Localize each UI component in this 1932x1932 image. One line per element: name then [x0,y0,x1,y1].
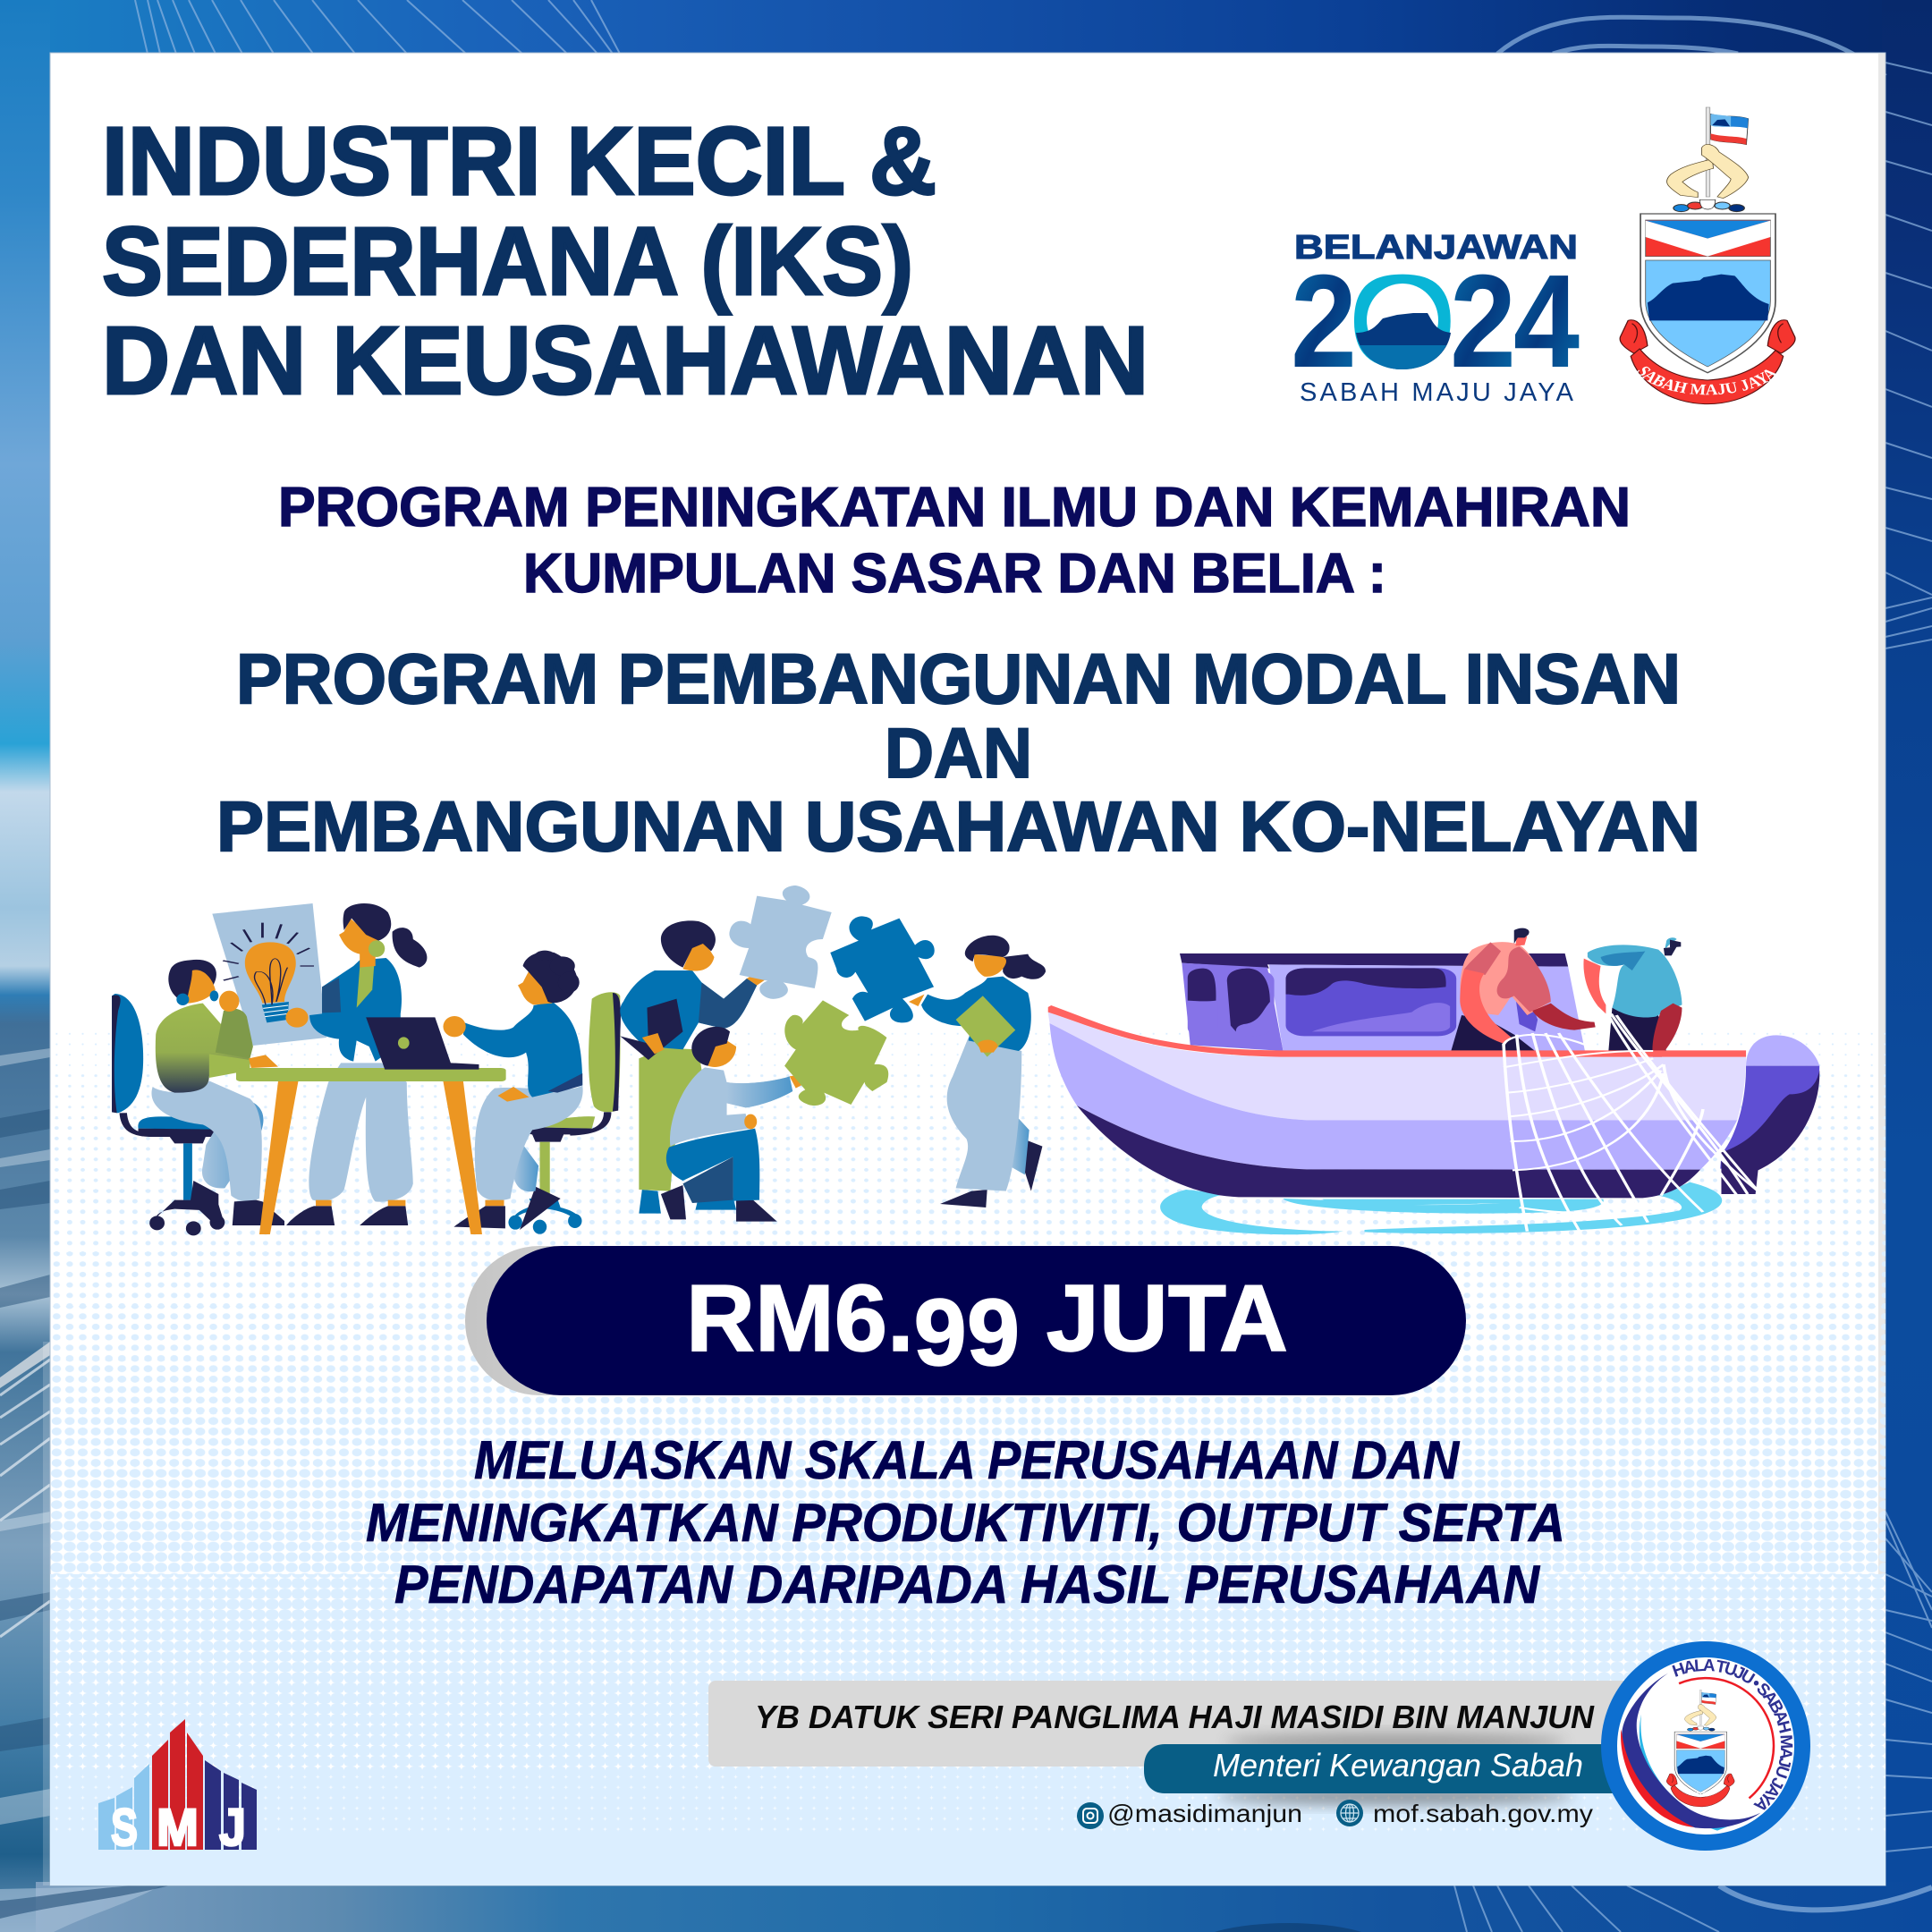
logo: Hala Tuju Sabah Maju Jaya badge [1601,1641,1810,1851]
heading: program pembangunan: PEMBANGUNAN USAHAWAN KO-NELAYAN [216,786,1700,866]
title: DAN KEUSAHAWANAN [102,306,1148,414]
social: website: mof.sabah.gov.my [1373,1800,1593,1827]
icon: Sabah coat of arms: SABAH MAJU JAYA [1637,367,1776,395]
logo: SMJ [98,1719,257,1857]
logo: Belanjawan 2024: BELANJAWAN [1294,229,1578,267]
figure: seated man with blue jacket [443,951,621,1234]
fishing net [1504,1013,1758,1232]
heading: program pembangunan: DAN [885,713,1032,792]
logo: SMJ: J [219,1799,246,1857]
boat hull [1048,1005,1819,1198]
illustration: fishing boat with two fishermen and net [1048,928,1819,1234]
logo: SMJ: M [157,1799,199,1857]
figure: seated woman in green [112,960,284,1235]
social: instagram handle: @masidimanjun [1107,1800,1302,1827]
icon: Sabah coat of arms [1619,107,1796,404]
puzzle piece: light blue [729,886,832,999]
description text: MENINGKATKAN PRODUKTIVITI, OUTPUT SERTA [366,1493,1565,1553]
figure: standing woman presenting [285,903,427,1225]
logo: Belanjawan 2024 [1291,229,1580,407]
heading: program peningkatan [278,477,1631,605]
heading: program peningkatan: KUMPULAN SASAR DAN BELIA : [523,543,1386,605]
description text: MELUASKAN SKALA PERUSAHAAN DAN [474,1430,1461,1490]
figure: crouching person [661,1027,807,1222]
logo: Belanjawan 2024: 0 [1346,248,1459,395]
table and laptop [236,1017,506,1234]
illustration: board with light bulb [212,903,326,1046]
heading: program peningkatan: PROGRAM PENINGKATAN ILMU DAN KEMAHIRAN [278,477,1631,538]
heading: program pembangunan [216,639,1700,866]
amount pill: RM6.99 JUTA: RM6. [686,1266,912,1371]
figure: fisherman in blue shirt [1583,937,1682,1066]
water ripples [1160,1182,1722,1234]
amount pill: RM6.99 JUTA: 99 [914,1280,1020,1385]
illustration: people collaborating with puzzle pieces [112,886,1046,1235]
logo: Hala Tuju Sabah Maju Jaya badge: HALA TUJU • SABAH MAJU JAYA [1672,1659,1792,1810]
minister name bar [708,1681,1630,1767]
logo: Belanjawan 2024: 4 [1513,248,1580,395]
figure: standing man with folder [620,920,766,1214]
figure: woman holding folder and puzzle [909,936,1046,1208]
title: SEDERHANA (IKS) [102,207,913,315]
logo: Belanjawan 2024: 2 [1450,248,1516,395]
heading: program pembangunan: PROGRAM PEMBANGUNAN MODAL INSAN [236,639,1681,718]
puzzle piece: blue [830,916,935,1022]
minister title pill: Menteri Kewangan Sabah [1213,1747,1583,1784]
title: INDUSTRI KECIL & [102,106,936,215]
boat cabin [1180,953,1585,1051]
logo: Hala Tuju Sabah Maju Jaya badge: SABAH MAJU JAYA [1694,1791,1707,1794]
puzzle piece: green [784,1000,888,1106]
description text: PENDAPATAN DARIPADA HASIL PERUSAHAAN [394,1555,1541,1614]
figure: fisherman in pink shirt [1451,928,1596,1051]
amount pill: RM6.99 JUTA: JUTA [1020,1266,1288,1371]
description text [366,1430,1565,1614]
title [102,106,1148,414]
minister title pill [1144,1733,1637,1805]
logo: Belanjawan 2024: 2 [1291,248,1357,395]
minister name bar: YB DATUK SERI PANGLIMA HAJI MASIDI BIN MANJUN [755,1699,1595,1735]
logo: SMJ: S [111,1799,138,1857]
logo: Belanjawan 2024: SABAH MAJU JAYA [1300,378,1574,407]
amount pill: RM6.99 JUTA [465,1246,1466,1395]
